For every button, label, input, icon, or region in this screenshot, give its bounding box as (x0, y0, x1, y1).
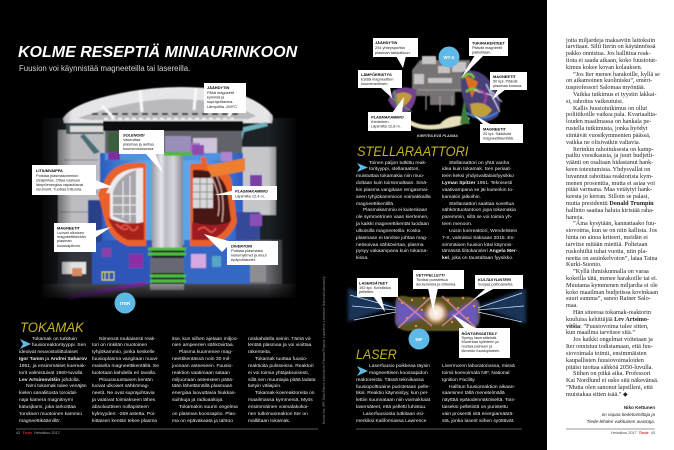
text: right page article: maa. (566, 302, 578, 309)
callout: magneetit 20 kpl: magneettikenttää. (483, 136, 514, 140)
text: right page article: Kurki-Suonio. (566, 261, 602, 268)
text: right page article: louden maailmassa on hankala pe- (566, 118, 651, 125)
blue body (100, 153, 243, 245)
callout: litiumvaippa: lämpöenergiaa vapauttavat (36, 182, 84, 187)
callout: tukirakenteet (461, 38, 508, 78)
text: tokamak column 4: rakenteita. (248, 350, 271, 355)
callout: röntgensäteily: lämmön fuusiopisteen. (462, 348, 500, 353)
text: tokamak column 3 (172, 336, 238, 424)
text: tokamak column 3: reaktion vaatimaan sataan (172, 371, 230, 376)
text: tokamak column 4: lentää plasmaa ja voi vioittaa (248, 343, 311, 348)
text: stellarator column 2: 7-X, valmistui Saksaan 2015. En- (442, 236, 515, 241)
text: right page article: Vaikka tutkimus ei tyystin lakkai- (573, 91, 657, 98)
text: right page article: pitäisi tuottaa sähköä 2050-luvulla. (566, 364, 653, 370)
text: laser column 1: fuusiopolttoaine puristetaan pelle- (356, 385, 430, 390)
callout: plasmakammio (W7-X): Kierteinen. (371, 119, 390, 124)
text: tokamak column 2: luovat ulkoiset sähkömag- (92, 384, 149, 389)
text: tokamak column 4: Tokamak-koereaktoreita on (255, 391, 315, 396)
badge: ITER: ITER (120, 301, 131, 306)
text: right page article: keesta jo kerran. Silloin se palasi, (566, 193, 649, 200)
text: tokamak column 1: torit valmistuivat 1960-luvulla (19, 371, 82, 376)
text: tokamak column 3: joonaan asteeseen. Fuusio- (172, 364, 233, 369)
text: right page article: ”Mutta olen sanonut lapsilleni, että (566, 384, 653, 391)
badge: W7-X: W7-X (444, 55, 455, 60)
text: right page article: poliitikoille vaikea pala. Kvartaalita- (566, 111, 657, 118)
callout: röntgensäteily: RÖNTGENSÄTEILY (462, 331, 497, 336)
callout: magneetit 20 kpl: 20 kpl. Säätävät (483, 131, 512, 136)
text: right page article: kaupallisten fuusiovoimaloiden (566, 357, 644, 364)
callout: kultasylinteri: Suojaa polttoainetta. (478, 282, 513, 286)
text: stellarator column 2: kamakin jalkoihin. (442, 195, 481, 200)
text: tokamak column 4: ensimmäinen voimalakokoi- (248, 405, 309, 410)
text: stellarator column 1: doltaan kuin toiminnaltaan. Sinä- (356, 181, 428, 186)
text: right page article: kokeilla tätä, menee harakoille tai ei. (566, 275, 657, 282)
white right page (547, 0, 674, 450)
text: tokamak column 3: energiaa luovuttavia hiukkas- (172, 391, 236, 396)
text: right page article: ”Kyllä ihmiskunnalla on varaa (573, 268, 649, 275)
text: laser column 1: reaktoreista. Tässä tekniikassa (356, 378, 424, 383)
text: right page article: menen prosenttia, mutta ei asiaa voi (566, 180, 655, 187)
text: right page article: siintävät vuosikymmenien päässä, (566, 132, 650, 139)
callout: jäähdytin (tokamak): Pitää magneetit (207, 90, 235, 95)
text: right page article: pakko onnistua. Jos hallittua reak- (566, 50, 651, 57)
callout: jäähdytin (W7-X): 254 yhteysporttia (375, 45, 405, 50)
callout: divertori (204, 234, 278, 265)
text: stellarator column 2: Lyman Spitzer 1951. Teknisesti (442, 181, 512, 186)
callout: litiumvaippa (32, 165, 113, 195)
callout: plasmakammio (tokamak): Läpimitta 12,4 m. (235, 194, 265, 198)
text: tokamak column 4 (248, 336, 316, 424)
text: stellarator column 1: kissa. (356, 256, 369, 261)
illustration: ITER tokamak cutaway (38, 85, 300, 303)
text: stellarator column 1: magneettikentillä. (356, 202, 394, 207)
text: tokamak column 1: kielen sanaliitosta toroidal- (19, 391, 77, 396)
author credit: Niko Kettunen (624, 405, 655, 410)
text: tokamak column 1: Nimi tokamak tulee venäjän (26, 384, 87, 389)
text: tokamak column 3: Plasma kuumenee mag- (179, 350, 233, 355)
text: stellarator column 2: teen keksi yhdysvaltalaisfyysikko (442, 174, 514, 179)
callout: plasmakammio (W7-X) (368, 97, 411, 131)
callout: röntgensäteily: Murentaa sylinterin ja (462, 339, 499, 344)
credit line: Kuvat: Iter, IPP, Max-Planck Institute for Plasma Physics, Lawrence Livermore National Laboratory (322, 276, 326, 424)
text: tokamak column 1: magneettikäämillä'. (19, 419, 61, 424)
text: tokamak column 3: tään lähettämällä plasmaan (172, 384, 232, 389)
callout: plasmakammio (W7-X): PLASMAKAMMIO (371, 114, 404, 120)
callout: kultasylinteri: KULTASYLINTERI (478, 277, 512, 282)
text: tokamak column 3: nien ampeerien sähkövirtaa. (172, 343, 234, 348)
text: tokamak column 2: Pituussuuntaisen kentän (99, 378, 153, 383)
callout: lasersäteet: LASERSÄTEET (359, 280, 388, 286)
text: stellarator column 2: tämässä liittokansleri Angela Mer- (442, 249, 517, 254)
footer: page 42: 42 Tiede Heinäkuu 2017 (16, 431, 60, 435)
icon: blue arrow stellarator (357, 163, 368, 172)
text: laser column 2: stä, jonka laserit siihen syöttävät. (442, 419, 514, 424)
text: stellarator column 1: seen tyhjiökammioon voimakkailla (356, 195, 431, 200)
text: tokamak column 4: reaktioita pulsseissa. Reaktori (248, 364, 314, 369)
text: stellarator column 2: simmäisen fuusion käsi käynnis- (442, 243, 513, 248)
text: tokamak column 4: roiskahdella seinin. Tämä vii- (248, 336, 312, 342)
text: stellarator column 2: vaativampana se jäi kuitenkin to- (442, 188, 514, 193)
text: right page article: tiota ei saada aikaan, koko fuusiotut- (566, 57, 657, 64)
text: tokamak column 1 (19, 336, 87, 424)
callout: litiumvaippa: sisäpintaa. Ottaa vastaan (36, 178, 80, 182)
text: right page article: suuri summa”, sanoo Rainer Salo- (566, 295, 651, 302)
callout: jäähdytin (tokamak): suprajohtavina. (207, 99, 233, 104)
callout: litiumvaippa: LITIUMVAIPPA (36, 168, 63, 173)
text: right page article: pailtu vuosikausia, ja juuri budjetti- (566, 152, 654, 159)
badge: ITER (114, 292, 136, 314)
callout: jäähdytin (W7-X) (373, 38, 418, 68)
callout: plasmakammio (tokamak) (214, 186, 277, 200)
callout: vetypelletti: VETYPELLETTI (416, 272, 445, 278)
text: laser column 2: toimii koevoimala NIF, National (442, 371, 510, 376)
text: tokamak column 1: 'toruksen muotoinen kammio (19, 412, 82, 417)
text: laser column 2 (442, 364, 516, 424)
main title: KOLME RESEPTIÄ MINIAURINKOON (18, 44, 297, 61)
callout: plasmakammio (tokamak): PLASMAKAMMIO (235, 188, 268, 194)
text: stellarator column 2: kel, joka on taustaltaan fyysikko. (442, 256, 513, 261)
icon: blue arrow laser (357, 366, 368, 376)
callout: vetypelletti (413, 270, 464, 311)
text: right page article: Iterinkin rahoituksesta on kamp- (573, 146, 654, 152)
text: laser column 1: lasersäteet, että pelletti luhistuu. (356, 405, 427, 410)
text: stellarator column 1: torityyppi, stellaraattori, (369, 167, 420, 172)
text: tokamak column 2: maisella magneettikentällä. Se (92, 364, 159, 369)
callout: divertori: Poistaa plasmasta (231, 248, 264, 253)
text: tokamak column 3: itse, kun siihen ajetaan miljoo- (172, 336, 238, 342)
callout: solenoidi: plasmaa ja auttaa (123, 142, 155, 146)
text: right page article: joita miljardeja maksaviin laitoksiin (566, 36, 655, 44)
callout: magneetit 20 kpl: MAGNEETIT (483, 126, 507, 132)
text: right page article: tusprofessori Salomaa myöntää. (566, 84, 645, 91)
text: tokamak column 2: Nimensä mukaisesti reak- (99, 336, 156, 342)
footer: page 43: Heinäkuu 2017 Tiede 43 (611, 431, 655, 435)
text: right page article: siovoima, kun se on niin kallista. Jos (566, 227, 657, 234)
heading: laser: LASER (356, 347, 397, 362)
callout: röntgensäteily: nostaa paineen ja (462, 343, 493, 348)
callout: magneetit (tokamak): Luovat ulkoisen (57, 230, 84, 235)
callout: jäähdytin (tokamak) (204, 83, 246, 113)
text: right page article: kimus kokee kovan kolauksen. (566, 64, 642, 71)
text: right page article: Siihen on pitkä aika. Professori (573, 370, 651, 377)
text: right page article: neetta on asuinkelvoton”, lataa Taina (566, 254, 657, 262)
callout: lasersäteet (357, 278, 398, 312)
text: stellarator column 1: muistuttaa tokamakia niin muo- (356, 174, 424, 179)
text: right page article (566, 36, 660, 398)
heading: tokamak: TOKAMAK (20, 320, 84, 335)
text: tokamak column 2: ja vaativat toimiakseen lähes (92, 398, 155, 403)
text: right page article: Jos kaikki ongelmat voitetaan ja (573, 336, 653, 343)
heading: stellaraattori: STELLARAATTORI (357, 144, 468, 159)
callout: jäähdytin (W7-X): plasman tarkkailuun. (375, 50, 411, 55)
text: laser column 2: saaminen tällä menetelmällä (442, 391, 505, 396)
text: tokamak column 4: malliltaan tokamak. (248, 419, 290, 424)
text: right page article: vaikka ne olisivatkin valtavia. (566, 139, 640, 146)
text: tokamak column 2: fuusioplasma vangitaan nuuvi- (92, 357, 159, 362)
text: laser column 1: Laserfuusio poikkeaa täysin (369, 364, 430, 369)
author credit (587, 405, 655, 424)
text: tokamak column 4: sillä sen muuntajia pitää ladata (248, 378, 316, 383)
text: laser column 2: taiseksi pelletistä on puristettu (442, 405, 508, 410)
callout: röntgensäteily (452, 314, 510, 358)
text: tokamak column 2: tyhjiökammio, jonka keskelle (92, 350, 155, 355)
text: stellarator column 2: idea kuin tokamak. Sen periaat- (442, 167, 511, 172)
text: right page article: muistakaa sitten isää.” ◆ (566, 391, 628, 398)
callout: magneetit 20 kpl (474, 115, 523, 143)
text: tokamak column 3: suihkuja ja radioaaltoja. (172, 398, 224, 403)
text: tokamak column 1: fuusioreaktorityyppi. Sen (32, 343, 86, 348)
text: tokamak column 2: absoluuttisen nollapisteen (92, 405, 149, 410)
callout: tukirakenteet: Pitävät magneetit (472, 45, 503, 50)
text: tokamak column 1: Lev Artsimovitšin johdolla. (19, 378, 80, 383)
author credit: on vapaa tiedetoimittaja ja (602, 412, 655, 417)
callout: solenoidi: Vakauttaa (123, 137, 141, 142)
label: kierteilevä plasma: KIERTEILEVÄ PLASMA (417, 134, 458, 138)
text: right page article: tarvitse mitään miettiä. Poltetaan (566, 241, 647, 248)
text: tokamak column 2: tori on rinkilän muotoinen (92, 343, 147, 348)
text: right page article: Kallis fuusiotutkimus on ollut (573, 105, 647, 112)
callout: tukirakenteet: paikoillaan. (472, 50, 491, 54)
text: tokamak column 4: tietyin väliajoin. (248, 384, 281, 389)
text: laser column 1: Laserfuusiosta tutkitaan esi- (363, 412, 424, 417)
callout: magneetit (tokamak) (54, 223, 111, 252)
illustration: NIF laser target (348, 288, 526, 331)
text: right page article: Hän siteeraa tokamak-reaktorin (573, 309, 651, 316)
text: tokamak column 1: katusjkami, joka tarkoittaa (19, 405, 76, 410)
text: stellarator column 2: teen menoon. (442, 222, 472, 227)
text: right page article: siovoimala toimii, ensimmäisten (566, 350, 647, 357)
text: right page article: rustella tutkimusta, jonka hyödyt (566, 125, 647, 132)
text: right page article: Kai Nordlund ei usko sitä näkevänsä. (566, 377, 658, 384)
callout: divertori: epäpuhtaudet. (231, 257, 256, 262)
text: right page article: ruskohiiltä tuhat vuotta, niin pla- (566, 248, 647, 255)
badge: W7-X (438, 46, 460, 68)
text: tokamak column 3: ma on epävakaata ja tahtoo (172, 419, 233, 424)
interior (103, 121, 243, 131)
badge: NIF: NIF (415, 337, 423, 342)
text: tokamak column 3: miljoonaan asteeseen pääs- (172, 378, 234, 383)
text: stellarator column 1: pysyy vakaampana kuin tokama- (356, 249, 428, 254)
text: stellarator column 1: netisoivaa sähkövirtaa, plasma (356, 243, 424, 248)
text: laser column 1: lettiin suunnataan niin voimakkaat (356, 398, 430, 403)
subtitle: Fuusion voi käynnistää magneeteilla tai lasereilla. (19, 64, 190, 73)
callout: röntgensäteily: Syntyy lasersäteistä. (462, 335, 497, 340)
text: tokamak column 2: tuotetaan kahdella eri tavalla. (92, 371, 156, 376)
text: laser column 1 (356, 364, 430, 424)
callout: magneetit (tokamak): MAGNEETIT (57, 226, 81, 230)
text: tokamak column 4: Tokamak tuottaa fuusio- (255, 357, 307, 362)
text: right page article: hanoja. (566, 214, 584, 221)
text: tokamak column 2 (92, 336, 159, 424)
callout: magneetit 50 kpl: MAGNEETIT (493, 74, 517, 79)
text: stellarator column 2: sähköntuotantoon jopa tokamakia (442, 208, 516, 213)
text: right page article: on aikamoinen kuolinisku”, emeri- (566, 77, 652, 84)
text: stellarator column 1: plasmaan ei tarvitse johtaa mag- (356, 236, 427, 241)
text: tokamak column 1: naja kamera magnitnymi (19, 398, 73, 403)
callout: vetypelletti: deuteriumia ja tritiumia. (416, 282, 456, 286)
text: stellarator column 2: paremmin, sillä se voi toimia yh- (442, 215, 512, 220)
text: tokamak column 2: kittaisen kentän tekee plasma (92, 419, 157, 424)
text: laser column 2: Livermoren laboratoriossa, missä (442, 364, 515, 369)
callout: kultasylinteri (473, 275, 523, 300)
text: right page article: hinta on ainoa kriteeri, meidän ei (566, 234, 648, 241)
text: stellarator column 1: Toinen paljon tutkittu reak- (369, 160, 427, 166)
text: laser column 2: näyttää epätodennäköiseltä. Tois- (442, 398, 515, 403)
text: right page article: vitšia: ”Fuusiovoima tulee sitten, (566, 323, 649, 330)
callout: jäähdytin (tokamak): JÄÄHDYTIN (207, 85, 229, 90)
dome (63, 87, 273, 123)
text: right page article: mutta presidentti Donald Trumpin (566, 200, 654, 207)
text: right page article: hallinto saattaa haluta kiristää raha- (566, 207, 654, 214)
text: stellarator column 1: ulkoisilla magneeteilla. Koska (356, 229, 420, 234)
text: laser column 1: magneettisen koossapidon (369, 371, 428, 376)
text: tokamak column 4: nen tutkimusreaktori Iter on (248, 412, 308, 417)
callout: magneetit (tokamak): koossapitoon. (57, 243, 81, 248)
text: stellarator column 1: ole symmetrinen vaan kierteinen, (356, 215, 428, 220)
text: laser column 1: merkiksi Kaliforniassa Lawrence (356, 419, 427, 424)
callout: jäähdytin (tokamak): Lämpötila -269°C (207, 104, 237, 109)
text: tokamak column 2: neetit. Ne ovat suprajohtavia (92, 391, 155, 396)
callout: divertori: heliumytimet ja muut (231, 252, 268, 258)
text: laser column 2: Hallitun fuusioreaktion aikaan- (449, 385, 515, 390)
badge: NIF (408, 328, 430, 350)
text: right page article: ”Aina kysytään, kannattaako fuu- (573, 220, 656, 227)
text: tokamak column 3: on plasman koossapito. Plas- (172, 412, 236, 417)
text: right page article: koko maailman budjetissa kovinkaan (566, 289, 658, 296)
callout: tukirakenteet: TUKIRAKENTEET (472, 40, 505, 46)
solenoid column (152, 153, 183, 248)
icon: blue arrow tokamak (20, 339, 31, 349)
text: stellarator column 2: Uusin koereaktori, Wendelstein (449, 229, 517, 234)
text: tokamak column 1: ideoivat neuvostoliittolaiset (19, 350, 78, 355)
text: tokamak column 1: 1951, ja ensimmäiset koereak- (19, 364, 86, 369)
callout: vetypelletti: Tiiviiksi puristettua (416, 277, 448, 282)
text: tokamak column 1: Tokamak on tutkituin (32, 336, 77, 342)
text: right page article: pitää varmana. Maa vetäytyi hank- (566, 186, 652, 193)
callout: jäähdytin (tokamak): kylminä ja (207, 94, 225, 100)
text: stellarator column 1: Plasmakammio ei kuitenkaan (363, 208, 427, 213)
text: right page article: Iter onnistuu todistamaan, että fuu- (566, 343, 653, 350)
callout: magneetit (tokamak): magneettikentän (57, 234, 86, 239)
callout: jäähdytin (W7-X): JÄÄHDYTIN (375, 40, 397, 45)
callout: solenoidi (119, 130, 164, 173)
callout: plasmakammio (W7-X): Läpimitta 12,8 m. (371, 124, 401, 128)
text: right page article: luvannut rahoittaa reaktorista kym- (566, 173, 653, 180)
side structures (58, 130, 105, 225)
callout: litiumvaippa: Poistaa plasmakammion (36, 173, 78, 178)
text: tokamak column 4: ei voi toimia yhtäjaksoisesti, (248, 371, 309, 376)
callout: magneetit (tokamak): plasman (57, 238, 72, 243)
callout: divertori: DIVERTORI (231, 244, 253, 248)
callout: lasersäteet: pellettiin. (359, 289, 374, 294)
callout: solenoidi: SOLENOIDI (123, 132, 145, 138)
text: right page article: kuuluisa kehittäjää Lev Artsimo- (566, 316, 649, 323)
text: stellarator column 1: ja kaikki magneettikentät luodaan (356, 222, 429, 227)
text: laser column 1: tiksi. Reaktio käynnistyy, kun pel- (356, 391, 428, 396)
callout: litiumvaippa: neutronit. Tuottaa tritiumia. (36, 186, 82, 192)
text: stellarator column 1: kin plasma vangitaan rengasmai- (356, 188, 428, 193)
text: tokamak column 1: Igor Tamm ja Andrei Saharov (19, 357, 87, 362)
text: right page article: tarvitaan. Silti Iterin on käytännössä (566, 43, 656, 50)
text: right page article: väänti on osaltaan hidastanut hank- (566, 159, 653, 166)
right chamber (190, 163, 237, 246)
text: stellarator column 2 (442, 160, 518, 261)
text: right page article: kun maailma tarvitsee sitä.” (566, 329, 635, 336)
text: stellarator column 1 (356, 160, 431, 261)
callout: magneetit 50 kpl: 50 kpl. Pitävät (493, 78, 518, 84)
text: right page article: Muutama kymmenen miljardia ei ole (566, 282, 658, 289)
text: stellarator column 2: Stellaraattori saattaa soveltua (449, 202, 514, 207)
illustration: Wendelstein 7-X stellarator (388, 56, 502, 130)
text: laser column 2: vain prosentti sitä energiamäärä- (442, 412, 514, 417)
text: stellarator column 2: Stellaraattori on yhtä vanha (449, 160, 509, 166)
callout: magneetit 50 kpl (490, 72, 527, 100)
callout: solenoidi: kuumennuksessa. (123, 146, 154, 151)
callout: magneetit 50 kpl: plasmaa koossa. (493, 83, 522, 88)
left chamber (98, 163, 146, 246)
author credit: Tiede-lehden vakituinen avustaja. (587, 419, 655, 424)
text: tokamak column 4: maailmassa kymmeniä. Myös (248, 398, 313, 403)
text: right page article: ”Jos Iter menee harakoille, kyllä se (573, 71, 660, 78)
text: tokamak column 3: neettikentässä noin 30 mil- (172, 357, 231, 362)
callout: lasersäteet: 192 kpl. Kohdistus (359, 285, 391, 290)
text: right page article: si, rahoitus vaikeutuisi. (566, 98, 623, 105)
callout: lämpöeristys: Estää magneettien (361, 76, 393, 82)
callout: lämpöeristys (358, 70, 402, 98)
text: laser column 2: Ignition Facility. (442, 378, 476, 383)
text: right page article: keen toteutumista. Yhdysvallat on (566, 166, 650, 173)
text: tokamak column 3: Tokamakin suurin ongelma (179, 405, 238, 410)
text: tokamak column 2: kylmyyden: -269 astetta. Poi- (92, 412, 156, 417)
callout: lämpöeristys: LÄMPÖERISTYS (361, 72, 392, 77)
callout: lämpöeristys: kuumenemisen. (361, 81, 388, 86)
